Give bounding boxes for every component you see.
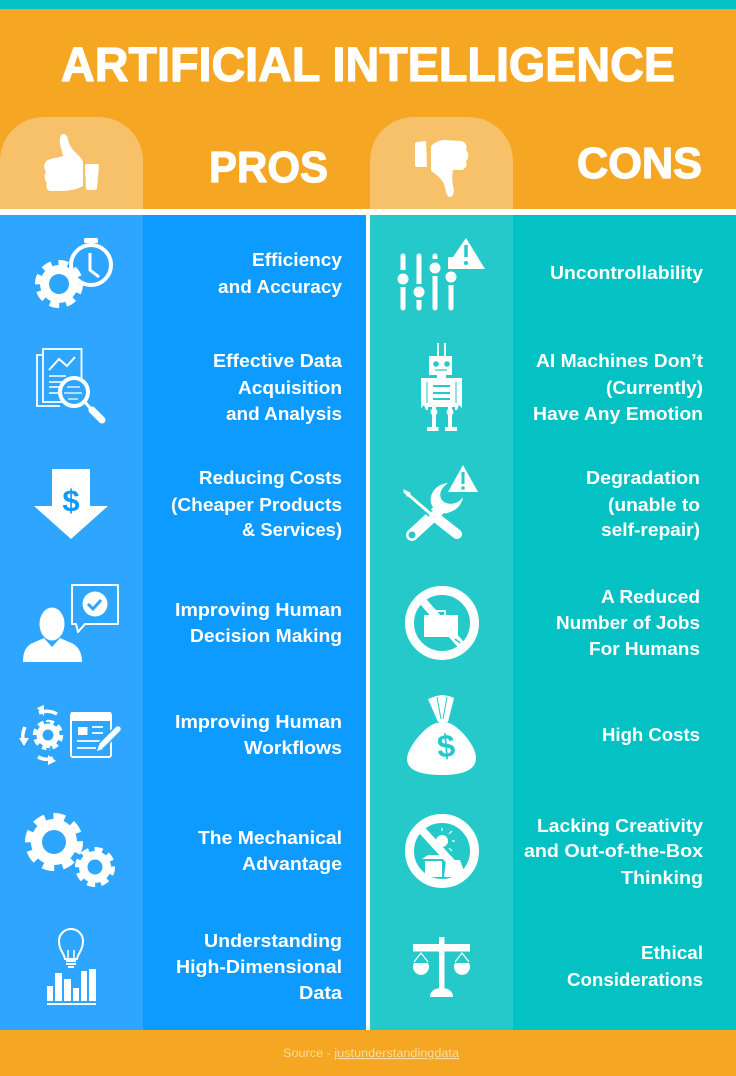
source text: Source - justunderstandingdata — [283, 1048, 460, 1060]
icon: money bag: $ — [436, 727, 457, 765]
tab: cons — [370, 117, 513, 209]
text: lacking creativity: Lacking Creativity — [537, 816, 703, 836]
header band — [0, 0, 736, 209]
icon: money bag — [407, 695, 476, 775]
text: no emotion: (Currently) — [606, 378, 703, 398]
text: no emotion — [533, 351, 703, 424]
text: fewer jobs: A Reduced — [601, 587, 700, 607]
text: ethical considerations: Ethical — [641, 943, 703, 963]
text: degradation — [586, 468, 700, 540]
text: human workflows — [175, 712, 342, 758]
text: high-dimensional data — [176, 931, 343, 1003]
footer — [0, 1030, 736, 1076]
icon: lightbulb and bar chart — [47, 929, 96, 1005]
icon: sliders with warning — [398, 238, 485, 308]
text: mechanical advantage: The Mechanical — [198, 828, 342, 848]
text: degradation: self-repair) — [601, 520, 700, 540]
icon: gear and stopwatch — [38, 238, 111, 304]
text: efficiency — [218, 250, 342, 297]
text: lacking creativity — [524, 816, 703, 888]
text: mechanical advantage: Advantage — [242, 854, 342, 874]
icon: dollar down arrow: $ — [62, 483, 80, 518]
text: data acquisition: Effective Data — [213, 351, 343, 371]
heading: pros: PROS — [209, 143, 328, 192]
text: human decision making: Improving Human — [175, 600, 342, 620]
icon: thumbs down — [415, 140, 468, 197]
title: ARTIFICIAL INTELLIGENCE — [61, 39, 675, 92]
text: mechanical advantage — [198, 828, 342, 874]
text: lacking creativity: Thinking — [621, 868, 703, 888]
text: no emotion: Have Any Emotion — [533, 404, 703, 424]
text: reducing costs: Reducing Costs — [199, 468, 342, 488]
text: reducing costs: (Cheaper Products — [171, 495, 342, 515]
text: high costs: High Costs — [602, 725, 700, 745]
text: fewer jobs: For Humans — [589, 639, 700, 659]
text: efficiency: Efficiency — [252, 250, 342, 270]
text: efficiency: and Accuracy — [218, 277, 342, 297]
text: high-dimensional data: Data — [299, 983, 343, 1003]
text: degradation: (unable to — [608, 495, 700, 515]
icon: no jobs — [410, 590, 474, 656]
text: reducing costs: & Services) — [242, 520, 342, 540]
text: no emotion: AI Machines Don’t — [536, 351, 703, 371]
icon: tools with warning — [403, 465, 478, 538]
icon: data report and magnifier — [37, 349, 102, 420]
text: ethical considerations — [567, 943, 703, 990]
panel: pros — [0, 215, 366, 1030]
icon: no creativity — [410, 818, 474, 884]
icon: two gears — [29, 817, 112, 884]
text: data acquisition: and Analysis — [226, 404, 342, 424]
text: degradation: Degradation — [586, 468, 700, 488]
text: human decision making: Decision Making — [190, 626, 342, 646]
icon: workflow gear and form — [19, 705, 118, 765]
text: human workflows: Workflows — [244, 738, 342, 758]
icon: dollar down arrow — [34, 469, 108, 539]
text: data acquisition: Acquisition — [238, 378, 342, 398]
icon: balance scale — [413, 937, 470, 997]
text: ethical considerations: Considerations — [567, 970, 703, 990]
text: high-dimensional data: High-Dimensional — [176, 957, 342, 977]
icon: robot — [421, 343, 462, 431]
text: lacking creativity: and Out-of-the-Box — [524, 841, 703, 861]
text: reducing costs — [171, 468, 342, 540]
text: fewer jobs — [556, 587, 700, 659]
heading: cons: CONS — [577, 139, 702, 188]
text: human workflows: Improving Human — [175, 712, 342, 732]
text: fewer jobs: Number of Jobs — [556, 613, 700, 633]
text: human decision making — [175, 600, 342, 646]
tab: pros — [0, 117, 143, 209]
text: data acquisition — [213, 351, 343, 424]
text: uncontrollability: Uncontrollability — [550, 263, 703, 283]
icon: thumbs up — [44, 134, 99, 191]
panel: cons — [370, 215, 736, 1030]
text: high-dimensional data: Understanding — [204, 931, 342, 951]
icon: person with approval bubble — [23, 585, 118, 662]
